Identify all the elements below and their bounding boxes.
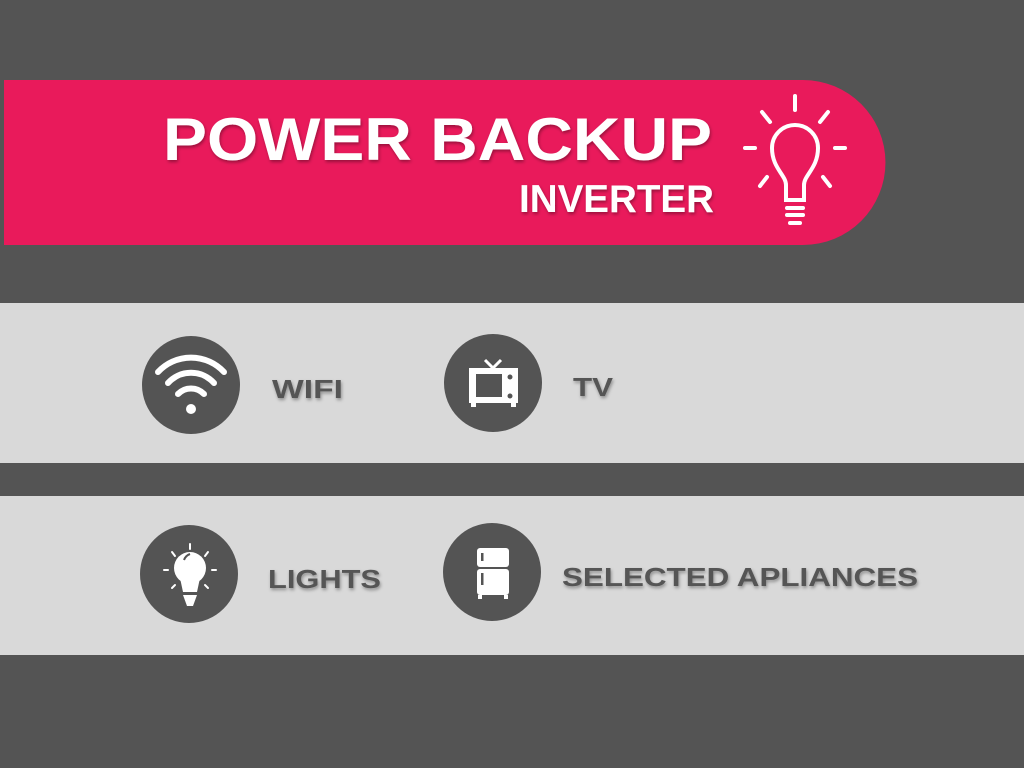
label: lights: LIGHTS bbox=[268, 564, 381, 594]
title: POWER BACKUP bbox=[163, 106, 712, 173]
icon: wifi bbox=[142, 336, 240, 434]
label: wifi: WIFI bbox=[272, 374, 343, 404]
subtitle: INVERTER bbox=[519, 178, 714, 221]
icon: tv bbox=[444, 334, 542, 432]
panel: row 2 bbox=[0, 496, 1024, 655]
icon: lights bbox=[140, 525, 238, 623]
panel: row 1 bbox=[0, 303, 1024, 463]
icon: fridge bbox=[443, 523, 541, 621]
label: tv: TV bbox=[573, 372, 614, 402]
banner bbox=[4, 80, 885, 245]
icon: bulb outline bbox=[745, 96, 845, 223]
label: selected appliances: SELECTED APLIANCES bbox=[562, 562, 918, 592]
